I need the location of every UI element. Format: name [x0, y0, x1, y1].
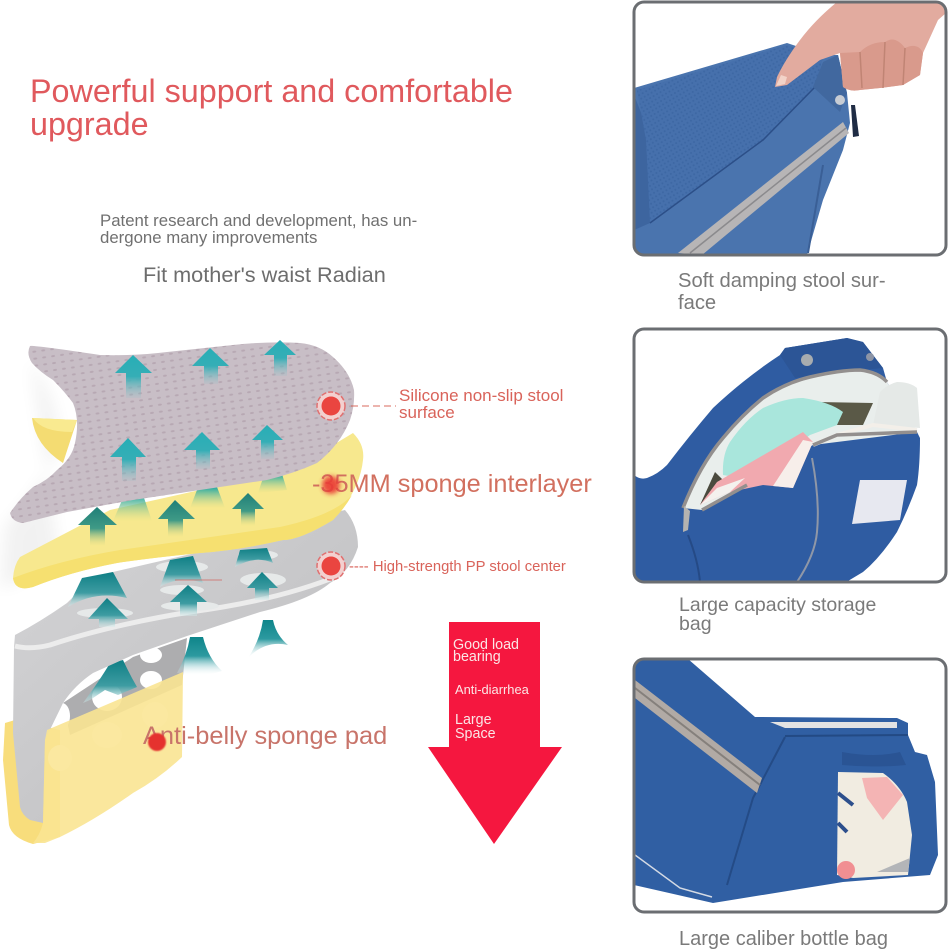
- snap and pull: [835, 95, 845, 105]
- pocket: [837, 772, 912, 878]
- callout: silicone surface: surface: [399, 403, 455, 422]
- back pillars: [63, 638, 187, 735]
- arrow labels: bearing: [453, 649, 501, 665]
- callout: silicone surface: Silicone non-slip stool: [399, 386, 563, 405]
- shadow: [0, 360, 60, 590]
- lower flares: [83, 620, 288, 703]
- pad holes: [48, 702, 168, 771]
- layer: silicone non-slip surface: [10, 342, 354, 523]
- flares on sponge: [113, 474, 287, 521]
- panel: bottle bag photo: [634, 659, 946, 912]
- callout: PP stool center: [317, 552, 566, 580]
- callout: PP stool center: ---- High-strength PP stool center: [349, 559, 566, 575]
- arrows on PP layer: [88, 572, 278, 627]
- arrow labels: Space: [455, 726, 496, 742]
- zippers: [683, 370, 887, 508]
- red down arrow: [428, 622, 562, 844]
- holes: [54, 647, 162, 729]
- caption: storage: Large capacity storage: [679, 594, 876, 616]
- layer: PP stool center: [13, 510, 358, 823]
- callout: 35MM sponge: -35MM sponge interlayer: [312, 470, 592, 498]
- arrows on sponge: [78, 493, 264, 546]
- arrow labels: Good load: [453, 637, 519, 653]
- callout: anti-belly pad: Anti-belly sponge pad: [143, 722, 387, 750]
- panel: stool surface photo: [634, 2, 946, 255]
- caption: soft damping: face: [678, 292, 716, 314]
- callout: silicone surface: [317, 386, 563, 422]
- interior: [683, 370, 917, 510]
- zipper: [635, 680, 762, 793]
- panel: storage bag photo: [634, 329, 946, 584]
- ellipses: [77, 550, 286, 618]
- arrows on silicone: [110, 340, 296, 481]
- thin red line: [175, 579, 222, 581]
- layer: pad back: [3, 720, 60, 844]
- text block: patent research: dergone many improvements: [100, 228, 317, 247]
- text block: patent research: Patent research and development, has un-: [100, 211, 417, 230]
- arrow labels: Large: [455, 712, 492, 728]
- title: upgrade: [30, 106, 149, 142]
- upper flares: [68, 548, 273, 607]
- elastic: [842, 752, 906, 766]
- arrow labels: Anti-diarrhea: [455, 682, 530, 697]
- diagram: layered stool: [0, 340, 363, 844]
- hand: [775, 2, 946, 91]
- title: Powerful support and comfortable: [30, 73, 513, 109]
- caption: soft damping: Soft damping stool sur-: [678, 270, 886, 292]
- subheading: fit: Fit mother's waist Radian: [143, 262, 386, 287]
- layer: sponge interlayer: [13, 418, 363, 588]
- label: [852, 480, 907, 524]
- zipper: [678, 122, 849, 255]
- caption: storage: bag: [679, 613, 712, 635]
- layer: anti-belly front pad: [33, 672, 183, 843]
